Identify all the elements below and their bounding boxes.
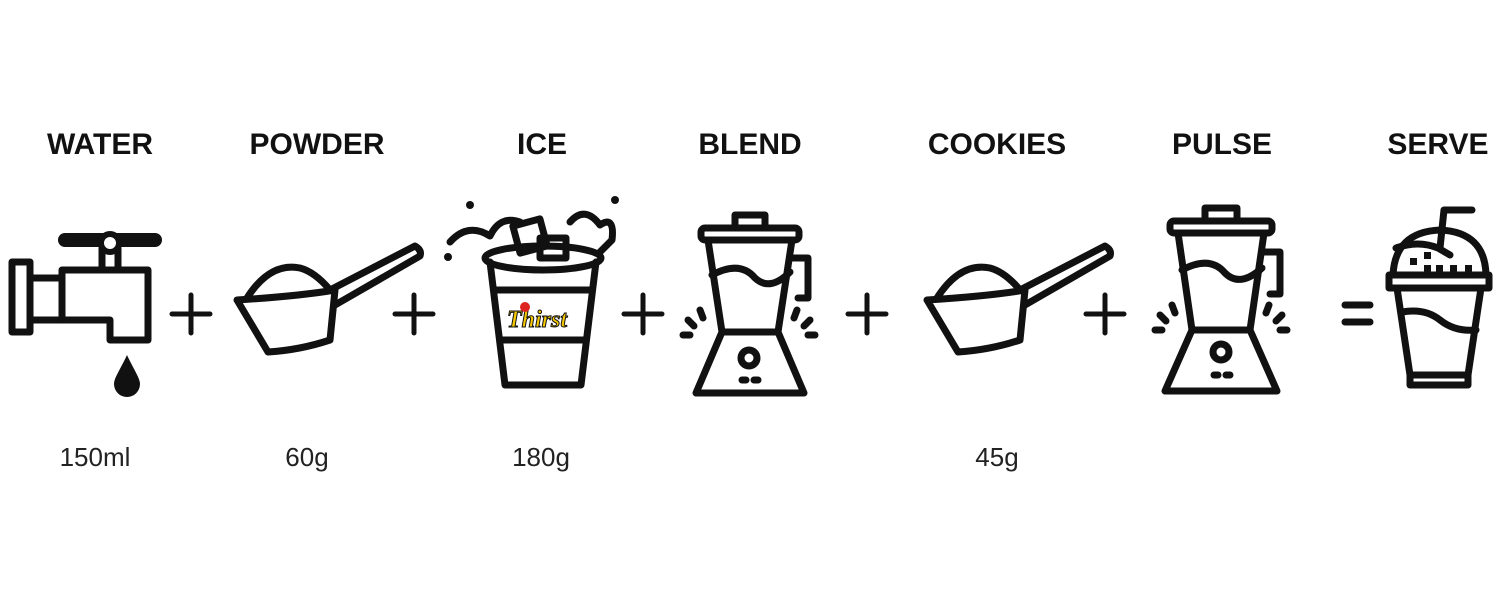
label: ice: ICE — [517, 128, 567, 161]
icon: serve cup — [1389, 210, 1489, 385]
icon: ice cup — [444, 196, 619, 385]
amount: cookies: 45g — [975, 442, 1019, 472]
label: water: WATER — [47, 128, 153, 161]
plus 3 — [624, 295, 662, 333]
icon: scoop powder — [237, 246, 420, 352]
plus 4 — [848, 295, 886, 333]
label: serve: SERVE — [1387, 128, 1489, 161]
label: blend: BLEND — [698, 128, 802, 161]
plus 1 — [172, 295, 210, 333]
label: cookies: COOKIES — [928, 128, 1066, 161]
icon: blender pulse — [1155, 208, 1287, 391]
icon: tap — [12, 234, 155, 397]
equals — [1345, 305, 1370, 322]
icon: ice cup: Thirst — [507, 307, 568, 333]
label: pulse: PULSE — [1172, 128, 1272, 161]
icon: scoop cookies — [927, 246, 1110, 352]
plus 5 — [1086, 295, 1124, 333]
amount: water: 150ml — [60, 442, 130, 472]
label: powder: POWDER — [250, 128, 385, 161]
amount: powder: 60g — [285, 442, 329, 472]
amount: ice: 180g — [512, 442, 570, 472]
icon: blender — [683, 215, 815, 393]
plus 2 — [395, 295, 433, 333]
